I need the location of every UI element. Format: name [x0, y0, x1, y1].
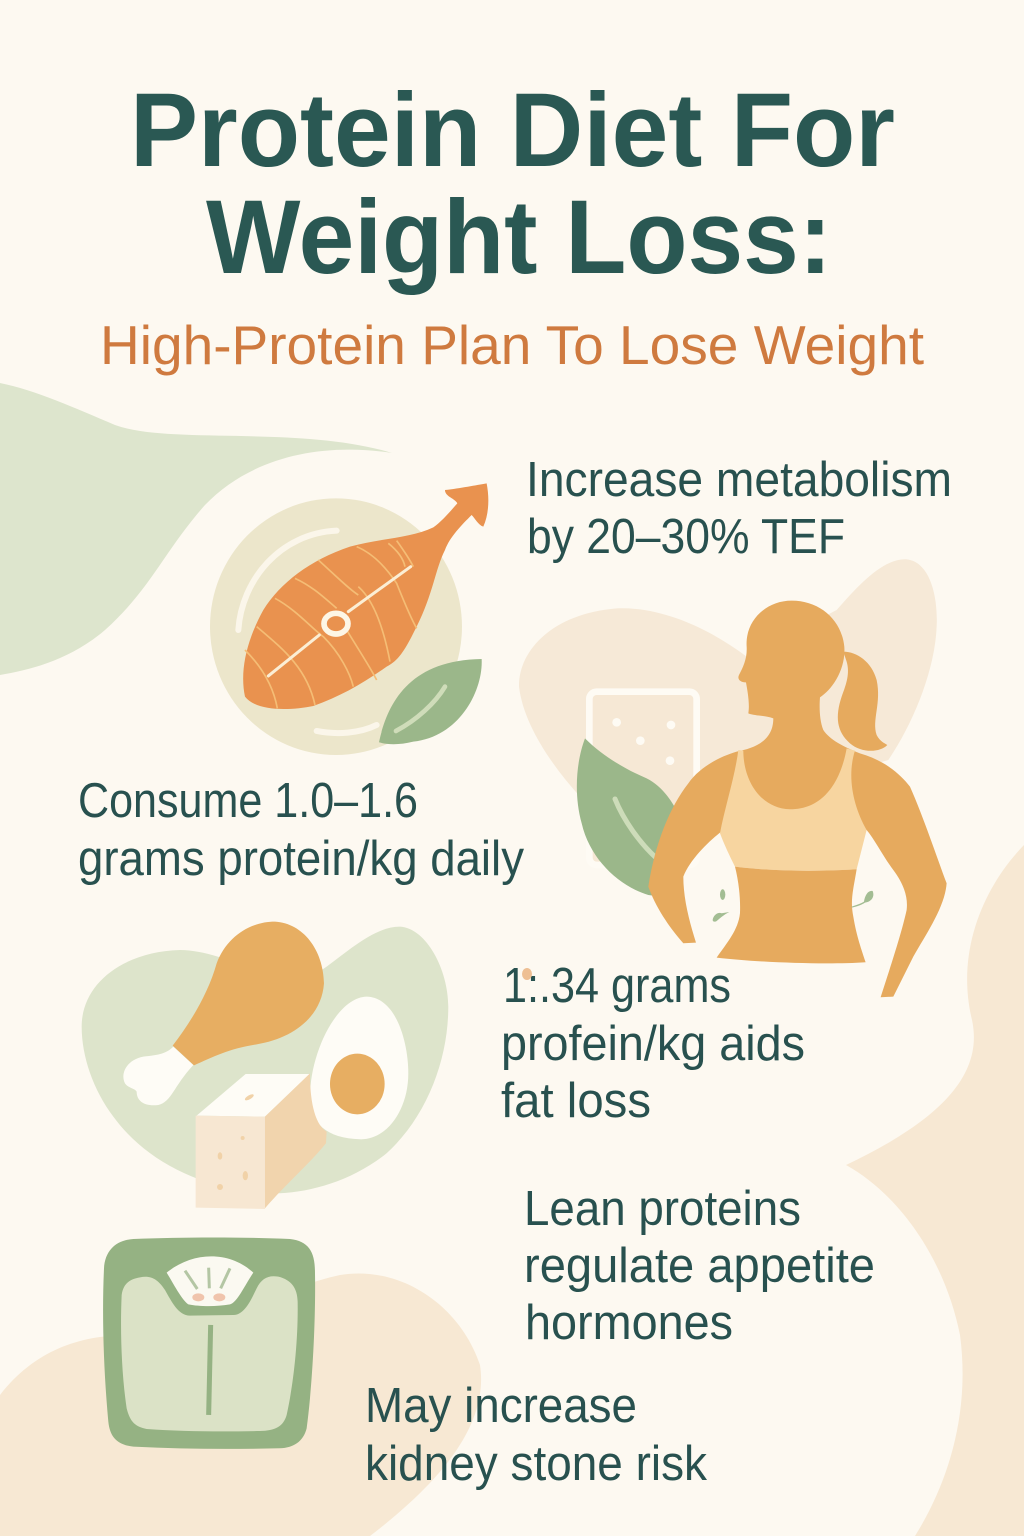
tofu top face [197, 1074, 310, 1117]
text: kidney stone [365, 1379, 707, 1491]
text: lean proteins: Lean proteins [524, 1182, 801, 1236]
text: metabolism: Increase metabolism [526, 453, 952, 507]
title [130, 72, 895, 296]
scale platform [121, 1276, 298, 1431]
icon: salmon fillet on plate with arrow [210, 483, 488, 755]
subtitle: High-Protein Plan To Lose Weight [100, 314, 924, 376]
text: metabolism [526, 453, 952, 564]
smudge on number [522, 968, 532, 980]
text: fat loss [501, 959, 805, 1128]
tofu block [589, 692, 697, 865]
title: Weight Loss: [206, 179, 832, 296]
text: fat loss: profein/kg aids [501, 1017, 805, 1071]
icon: chicken, egg and tofu [82, 922, 448, 1209]
drumstick meat [173, 922, 324, 1065]
green blob [82, 927, 448, 1193]
text: lean proteins: regulate appetite [524, 1239, 875, 1293]
ponytail [838, 652, 887, 751]
tofu side face [265, 1073, 327, 1208]
text: lean proteins: hormones [525, 1296, 733, 1350]
text: fat loss: 1:.34 grams [503, 959, 731, 1013]
green leaf [577, 738, 680, 897]
leaf [379, 659, 482, 744]
text: kidney stone: May increase [365, 1379, 637, 1433]
icon: bathroom scale [103, 1237, 315, 1449]
plate [210, 498, 462, 755]
peach blob behind woman [519, 559, 937, 830]
sports top [720, 748, 867, 871]
egg [310, 997, 408, 1139]
scale display [167, 1256, 253, 1306]
icon: woman with tofu and leaf [519, 559, 947, 997]
text: lean proteins [524, 1182, 875, 1350]
text: metabolism: by 20–30% TEF [527, 510, 845, 564]
background blob: peach right [846, 845, 1024, 1536]
text: consume: grams protein/kg daily [78, 832, 524, 886]
text: fat loss: fat loss [501, 1074, 651, 1128]
title: Protein Diet For [130, 72, 895, 189]
waist [717, 867, 866, 963]
background blob: peach bottom left [0, 1273, 481, 1536]
upper body and arms [648, 601, 947, 997]
text: consume [78, 774, 524, 886]
salmon with arrow tail [243, 483, 488, 709]
text: consume: Consume 1.0–1.6 [78, 774, 418, 828]
background blob: green top left [0, 383, 392, 675]
tofu front face [196, 1116, 265, 1209]
sprigs [713, 889, 873, 922]
text: kidney stone: kidney stone risk [365, 1437, 707, 1491]
drumstick bone [123, 1047, 193, 1105]
salmon flake lines [245, 541, 417, 708]
